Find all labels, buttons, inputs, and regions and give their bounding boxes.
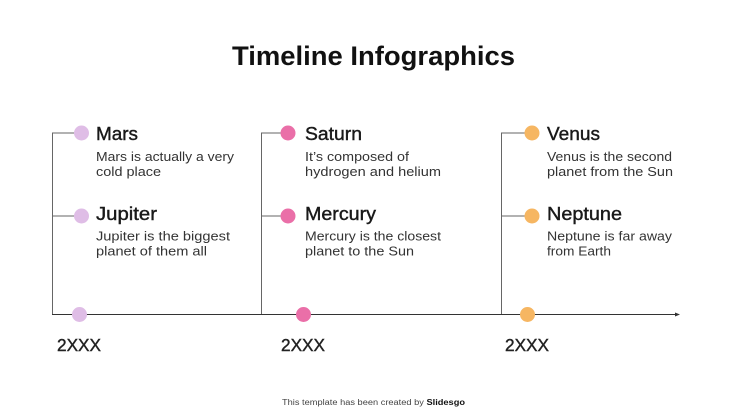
Mars text: Mars (96, 124, 138, 144)
icon: timeline dot 3 (520, 307, 535, 322)
icon: Jupiter dot (74, 208, 89, 224)
year label 1: 2XXX (57, 335, 101, 355)
icon: Neptune dot (524, 208, 540, 224)
timeline axis arrow (52, 312, 680, 316)
icon: Venus dot (524, 126, 540, 140)
icon: Saturn dot (280, 126, 296, 140)
year label 3: 2XXX (505, 335, 549, 355)
icon: timeline dot 1 (72, 307, 87, 322)
Neptune text: Neptune is far away (547, 228, 673, 244)
column: Venus and Neptune (502, 124, 673, 355)
Neptune text: Neptune (547, 204, 622, 224)
Venus text: Venus (547, 124, 600, 144)
Jupiter text: Jupiter (96, 204, 157, 224)
Venus text: planet from the Sun (547, 164, 673, 179)
Mercury text: planet to the Sun (305, 244, 414, 258)
icon: Mars dot (74, 126, 89, 140)
icon: Mercury dot (280, 208, 296, 224)
Saturn text: It’s composed of (305, 149, 409, 164)
Mercury text (305, 204, 441, 258)
Jupiter text (96, 204, 230, 258)
Mercury text: Mercury is the closest (305, 228, 441, 244)
column: Saturn and Mercury (262, 124, 441, 355)
Neptune text: from Earth (547, 244, 611, 258)
column: Mars and Jupiter (52, 124, 235, 355)
year label 2: 2XXX (281, 335, 325, 355)
title: Timeline Infographics (232, 41, 515, 71)
Mercury text: Mercury (305, 204, 376, 224)
Venus text (547, 124, 673, 179)
icon: timeline dot 2 (296, 307, 311, 322)
Saturn text: hydrogen and helium (305, 164, 441, 179)
Venus text: Venus is the second (547, 149, 672, 164)
Mars text: cold place (96, 164, 161, 179)
Saturn text (305, 124, 441, 179)
Saturn text: Saturn (305, 124, 362, 144)
Neptune text (547, 204, 673, 258)
Jupiter text: planet of them all (96, 244, 207, 258)
Jupiter text: Jupiter is the biggest (96, 228, 230, 244)
Mars text: Mars is actually a very (96, 149, 235, 164)
Mars text (96, 124, 235, 179)
footer credit: This template has been created by Slidesgo (282, 398, 465, 407)
